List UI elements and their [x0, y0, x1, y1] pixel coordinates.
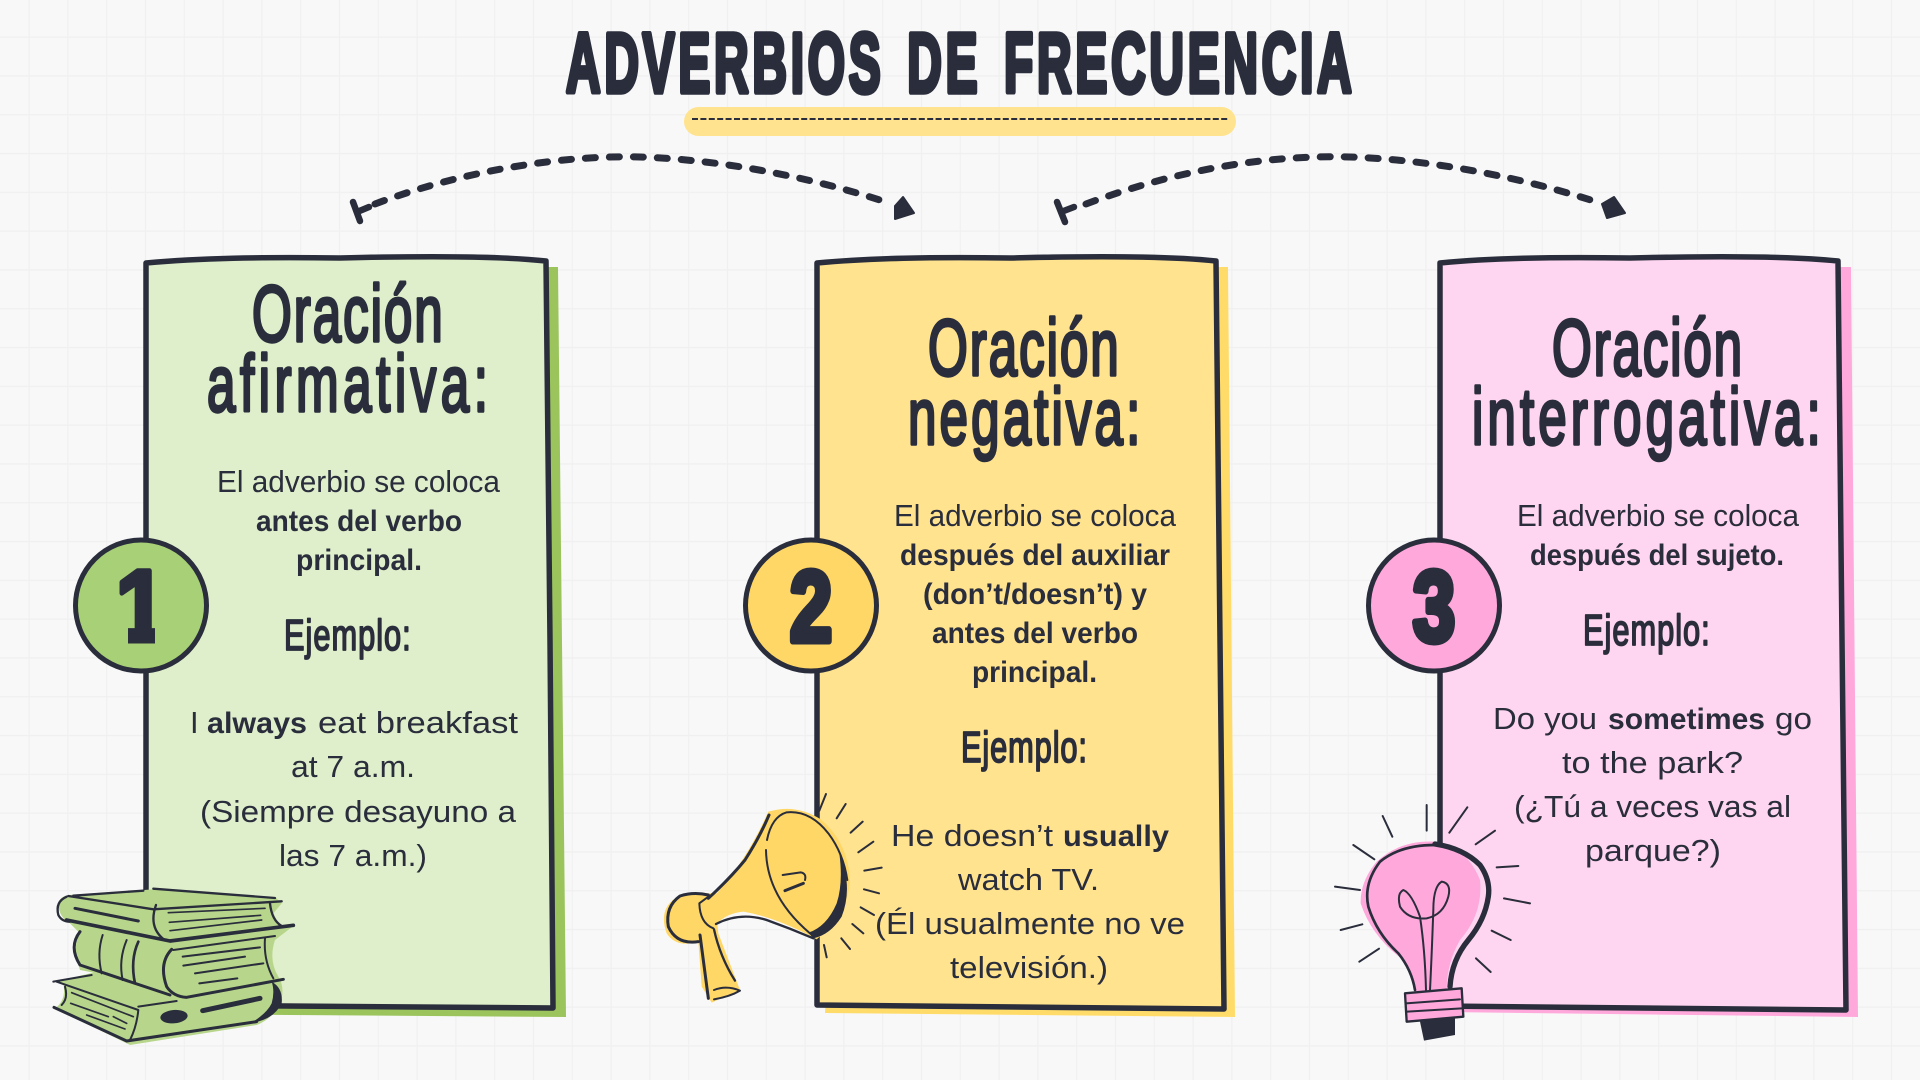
panel 1 rule: principal. [296, 544, 422, 577]
icon: light bulb [1335, 805, 1530, 1041]
panel 1 rule: El adverbio se coloca [217, 464, 501, 499]
panel 1 ejemplo label: Ejemplo: [284, 612, 411, 660]
panel 3 example: go [1775, 701, 1812, 736]
title underline pill [684, 107, 1236, 136]
number badge 3: 3 [1413, 551, 1455, 662]
panel 3 example: Do you [1493, 701, 1597, 736]
panel 3 rule [1517, 498, 1800, 572]
panel 2 rule: (don’t/doesn’t) y [923, 578, 1147, 611]
number badge 2: 2 [790, 551, 832, 662]
panel 1 rule: antes del verbo [256, 505, 462, 538]
number badge 2 [746, 540, 876, 671]
panel 1 example: at 7 a.m. [291, 749, 415, 784]
arrow: card 2 to card 3 [1057, 157, 1625, 222]
panel 3 example: sometimes [1608, 703, 1765, 736]
panel 3 rule: El adverbio se coloca [1517, 498, 1800, 533]
panel 3 example [1493, 701, 1812, 868]
number badge 3 [1368, 540, 1500, 671]
panel 2 ejemplo label: Ejemplo: [961, 724, 1087, 772]
panel 1 example: always [207, 707, 307, 740]
title: ADVERBIOS DE FRECUENCIA [566, 17, 1356, 110]
arrow: card 1 to card 2 [353, 157, 914, 221]
panel 3 example: parque?) [1585, 833, 1721, 868]
number badge 1: 1 [115, 548, 167, 663]
panel 2 example: watch TV. [957, 862, 1099, 897]
panel 2 rule: antes del verbo [932, 617, 1138, 650]
panel 3 offset shadow [1445, 267, 1858, 1017]
panel 2 offset shadow [825, 267, 1235, 1017]
panel 1 rule [217, 464, 501, 577]
panel 3 card [1440, 257, 1846, 1010]
number badge 1 [76, 540, 206, 671]
panel 2 rule [894, 498, 1177, 689]
panel 2 heading: negativa: [908, 373, 1140, 462]
panel 3 example: to the park? [1562, 745, 1743, 780]
panel 1 heading: Oración [252, 270, 443, 359]
panel 3 heading [1472, 304, 1821, 462]
panel 3 heading: interrogativa: [1472, 373, 1821, 462]
panel 1 example: las 7 a.m.) [279, 838, 427, 873]
panel 3 rule: después del sujeto. [1530, 539, 1784, 572]
panel 2 heading [908, 304, 1140, 462]
panel 1 example [190, 705, 518, 873]
panel 2 card [817, 257, 1224, 1009]
panel 3 ejemplo label: Ejemplo: [1583, 607, 1710, 655]
icon: megaphone [664, 794, 882, 1003]
panel 3 example: (¿Tú a veces vas al [1514, 789, 1791, 824]
panel 2 example: televisión.) [950, 950, 1108, 985]
panel 2 example [875, 818, 1185, 985]
panel 2 example: usually [1063, 820, 1169, 853]
panel 2 example: (Él usualmente no ve [875, 906, 1185, 941]
panel 1 example: I [190, 705, 199, 740]
icon: stack of books [53, 889, 293, 1045]
panel 1 heading [207, 270, 488, 429]
panel: oración afirmativa [146, 257, 566, 1017]
panel 3 heading: Oración [1552, 304, 1742, 393]
panel 1 example: (Siempre desayuno a [200, 794, 517, 829]
panel 2 rule: después del auxiliar [900, 539, 1170, 572]
panel 1 heading: afirmativa: [207, 340, 488, 429]
panel 1 card [146, 257, 553, 1008]
panel 1 example: eat breakfast [318, 705, 518, 740]
panel: oración interrogativa [1440, 257, 1858, 1017]
panel 2 rule: principal. [972, 656, 1097, 689]
panel 1 offset shadow [155, 267, 566, 1017]
panel 2 example: He doesn’t [891, 818, 1053, 853]
panel 2 rule: El adverbio se coloca [894, 498, 1177, 533]
panel 2 heading: Oración [928, 304, 1119, 393]
panel: oración negativa [817, 257, 1235, 1017]
